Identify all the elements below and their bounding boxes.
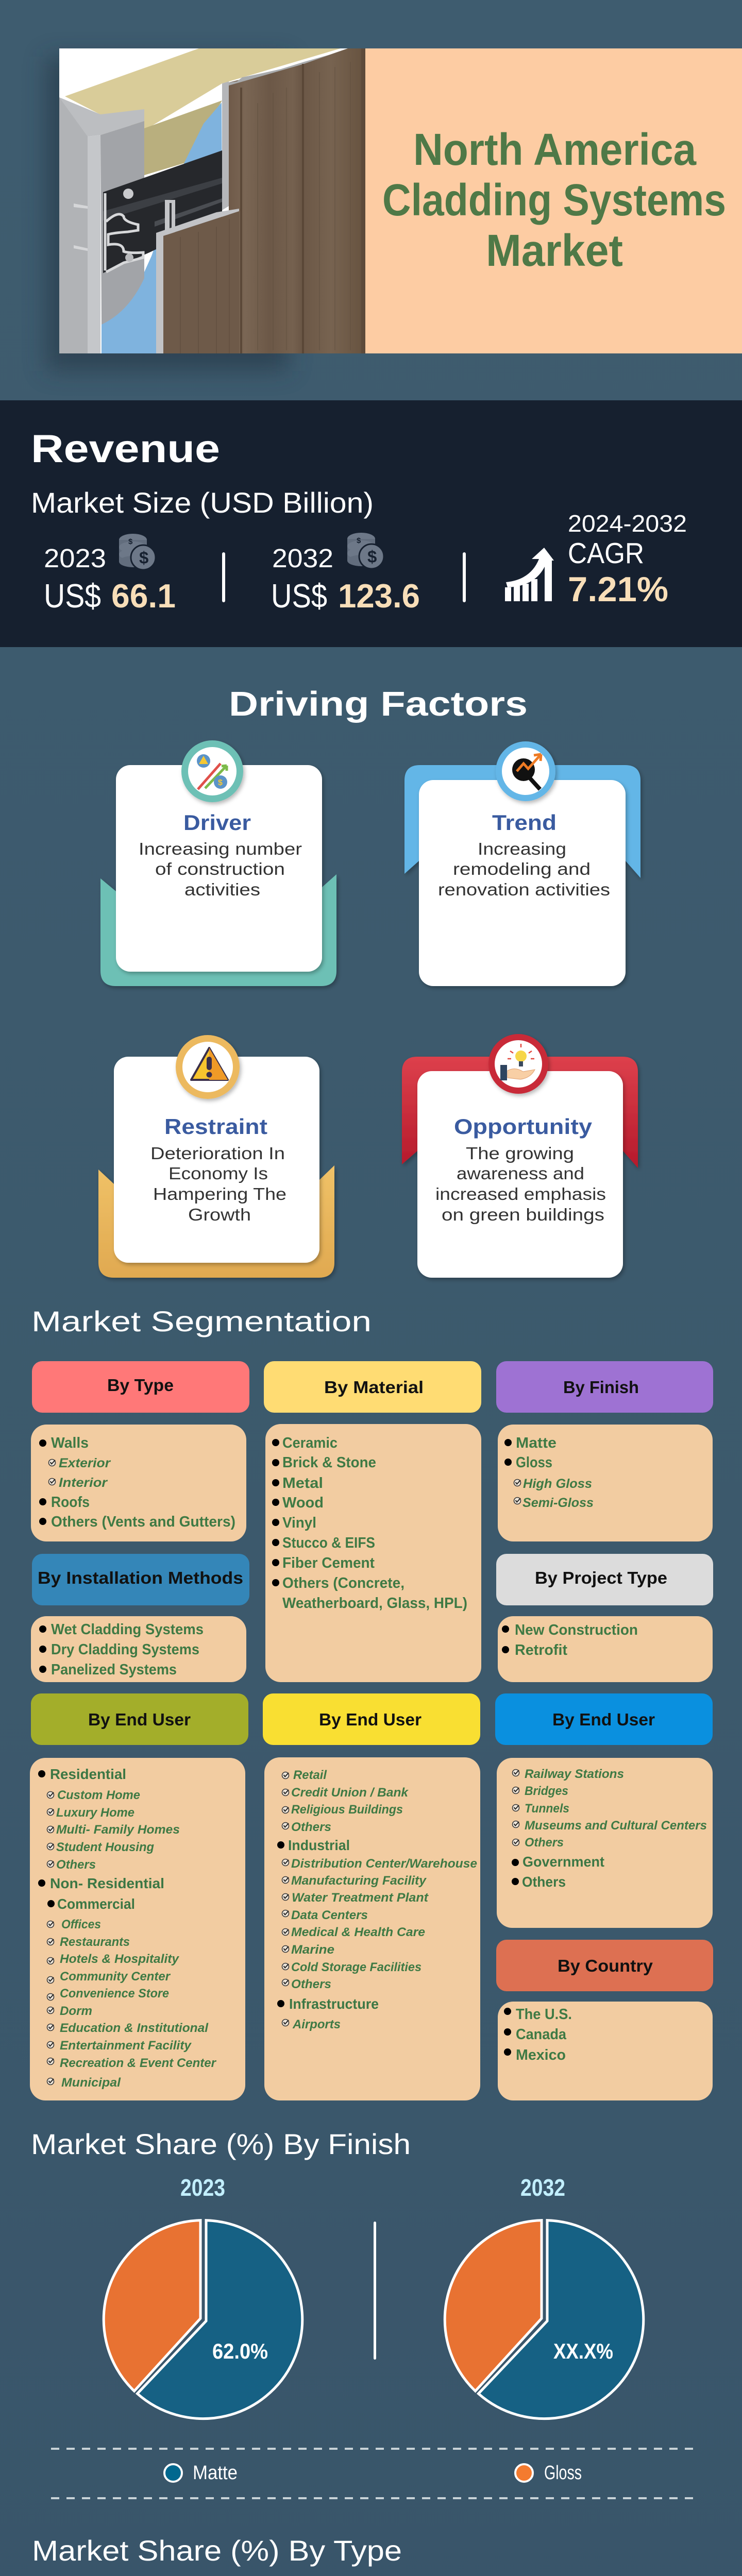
label: Opportunity	[454, 1114, 593, 1139]
title: North America	[413, 125, 697, 175]
panel: residential and non-residential list: Community Center	[60, 1970, 171, 1984]
panel: material list: Brick & Stone	[282, 1454, 376, 1471]
description	[438, 839, 610, 899]
panel: finish list: Gloss	[516, 1454, 552, 1471]
header: by material: By Material	[324, 1378, 424, 1397]
panel: finish list: Semi-Gloss	[522, 1496, 594, 1510]
panel: project type list: New Construction	[515, 1622, 638, 1638]
icon: coins 2032	[347, 533, 384, 569]
panel: residential and non-residential list: Offices	[61, 1918, 101, 1931]
header: by project type	[496, 1554, 713, 1605]
panel: industrial and infrastructure list: Religious Buildings	[291, 1803, 403, 1817]
heading: market share by type: Market Share (%) By Type	[32, 2534, 402, 2567]
panel: installation list	[31, 1616, 246, 1682]
description: The growing	[466, 1144, 574, 1163]
icon: growth chart	[505, 548, 554, 601]
description: activities	[184, 880, 260, 899]
panel: residential and non-residential list: Recreation & Event Center	[60, 2056, 217, 2070]
panel: residential and non-residential list: Non- Residential	[50, 1875, 164, 1891]
panel: country list: The U.S.	[516, 2006, 572, 2023]
panel: industrial and infrastructure list: Cold Storage Facilities	[291, 1960, 421, 1974]
label: Trend	[492, 810, 556, 835]
panel: material list: Stucco & EIFS	[282, 1535, 375, 1551]
panel: type list: Walls	[51, 1435, 89, 1451]
icon: coins 2023	[119, 534, 156, 570]
icon: driver	[181, 740, 243, 802]
description	[435, 1144, 606, 1224]
panel: industrial and infrastructure list: Industrial	[288, 1837, 350, 1853]
header: by end user (green)	[31, 1693, 248, 1745]
card: restraint	[98, 1035, 334, 1278]
header: by country: By Country	[558, 1956, 653, 1975]
subheading: market size: Market Size (USD Billion)	[31, 486, 374, 519]
panel: industrial and infrastructure list: Marine	[291, 1943, 334, 1957]
panel: country list: Canada	[516, 2026, 567, 2043]
panel: type list: Interior	[59, 1476, 108, 1490]
panel: material list: Others (Concrete,	[282, 1575, 404, 1591]
stat: 2032 revenue: 123.6	[338, 577, 420, 615]
description	[150, 1144, 286, 1224]
panel: residential and non-residential list: Others	[56, 1858, 96, 1872]
header: by type: By Type	[107, 1376, 174, 1395]
panel: residential and non-residential list: Student Housing	[56, 1840, 154, 1854]
panel: type list: Roofs	[51, 1494, 90, 1511]
pie chart: finish 2023	[104, 2221, 302, 2419]
panel: project type list: Retrofit	[515, 1642, 567, 1658]
panel: residential and non-residential list: Dorm	[60, 2004, 92, 2018]
panel: material list: Wood	[282, 1495, 324, 1511]
label: 2023 finish: 2023	[180, 2174, 225, 2201]
title	[382, 125, 726, 276]
heading: driving factors: Driving Factors	[229, 685, 528, 723]
description: on green buildings	[442, 1205, 604, 1224]
panel: installation list: Wet Cladding Systems	[51, 1621, 204, 1638]
panel: transport and government list: Others	[522, 1874, 566, 1890]
panel: residential and non-residential list: Municipal	[61, 2076, 121, 2090]
panel: industrial and infrastructure list: Credit Union / Bank	[291, 1786, 409, 1800]
panel: residential and non-residential list: Hotels & Hospitality	[60, 1952, 180, 1966]
description: Increasing	[478, 839, 566, 858]
panel: type list: Exterior	[59, 1456, 111, 1470]
header: by end user (blue)	[495, 1693, 713, 1745]
stat: 2023 revenue: US$	[44, 577, 101, 615]
panel: project type list	[498, 1616, 713, 1682]
divider	[463, 552, 466, 602]
header: by finish: By Finish	[563, 1378, 639, 1397]
card: trend	[404, 741, 640, 986]
description: Hampering The	[153, 1184, 286, 1204]
panel: transport and government list: Bridges	[525, 1784, 568, 1798]
label: Restraint	[164, 1114, 267, 1139]
stat: CAGR: CAGR	[568, 537, 644, 570]
description: remodeling and	[453, 859, 591, 878]
stat: 2023 revenue: 66.1	[111, 577, 176, 615]
heading: market segmentation: Market Segmentation	[31, 1305, 372, 1337]
description: of construction	[155, 859, 285, 878]
panel: residential and non-residential list: Restaurants	[60, 1935, 130, 1949]
panel: transport and government list: Others	[525, 1836, 564, 1850]
panel: transport and government list: Tunnels	[525, 1802, 569, 1816]
stat: 2023 revenue: 2023	[44, 544, 106, 573]
legend: finish	[164, 2462, 582, 2484]
header: by type	[32, 1361, 249, 1413]
description: Deterioration In	[150, 1144, 285, 1163]
panel: industrial and infrastructure list: Data Centers	[291, 1908, 368, 1922]
card: opportunity	[402, 1034, 638, 1278]
header: by installation methods: By Installation Methods	[38, 1568, 243, 1587]
stat: 2023 revenue	[44, 544, 176, 615]
panel: transport and government list	[497, 1758, 713, 1928]
title: Market	[486, 226, 623, 276]
panel: material list: Weatherboard, Glass, HPL)	[282, 1595, 467, 1612]
header: by project type: By Project Type	[535, 1568, 667, 1587]
description: Increasing number	[139, 839, 302, 858]
stat: CAGR	[568, 510, 687, 609]
legend: finish: Gloss	[544, 2462, 582, 2484]
panel: material list: Vinyl	[282, 1515, 316, 1531]
description: awareness and	[457, 1164, 584, 1183]
hero: cladding system illustration	[59, 48, 365, 353]
header: by material	[264, 1361, 481, 1413]
panel: transport and government list: Government	[522, 1854, 604, 1870]
icon: driver: $	[218, 778, 223, 787]
panel: installation list: Panelized Systems	[51, 1662, 177, 1678]
heading: revenue: Revenue	[31, 427, 220, 471]
panel: material list	[265, 1424, 481, 1682]
panel: residential and non-residential list: Residential	[50, 1766, 126, 1782]
description: Economy Is	[168, 1164, 268, 1183]
description	[139, 839, 302, 899]
panel: industrial and infrastructure list: Others	[291, 1977, 331, 1991]
panel: industrial and infrastructure list: Airports	[292, 2018, 341, 2031]
panel: residential and non-residential list: Multi- Family Homes	[56, 1823, 180, 1837]
icon: warning	[176, 1035, 240, 1099]
header: by country	[496, 1940, 713, 1991]
stat: CAGR: 2024-2032	[568, 510, 687, 537]
legend: finish: Matte	[193, 2462, 238, 2484]
panel: residential and non-residential list: Entertainment Facility	[60, 2039, 192, 2053]
panel: industrial and infrastructure list: Others	[291, 1820, 331, 1834]
panel: industrial and infrastructure list: Infrastructure	[289, 1996, 379, 2012]
icon: opportunity	[488, 1034, 548, 1094]
panel: industrial and infrastructure list	[264, 1757, 480, 2100]
header: by end user (blue): By End User	[552, 1710, 655, 1729]
value: XX.X%: XX.X%	[553, 2339, 613, 2363]
hero image shadow	[46, 57, 289, 371]
panel: material list: Fiber Cement	[282, 1555, 375, 1571]
revenue panel	[0, 400, 742, 647]
panel: residential and non-residential list: Custom Home	[57, 1788, 140, 1802]
panel: transport and government list: Museums and Cultural Centers	[525, 1819, 707, 1833]
header: by finish	[496, 1361, 713, 1413]
divider	[222, 552, 225, 602]
panel: type list	[31, 1425, 246, 1541]
value: 62.0%: 62.0%	[212, 2339, 268, 2363]
stat: 2032 revenue: 2032	[272, 544, 333, 573]
header: by end user (yellow)	[263, 1693, 480, 1745]
stat: 2032 revenue	[271, 544, 420, 615]
icon: trend	[496, 741, 555, 801]
panel: industrial and infrastructure list: Water Treatment Plant	[292, 1891, 429, 1905]
panel: material list: Metal	[282, 1475, 323, 1492]
heading: market share by finish: Market Share (%) By Finish	[31, 2128, 411, 2160]
header: by end user (green): By End User	[88, 1710, 191, 1729]
header: by end user (yellow): By End User	[319, 1710, 421, 1729]
label: 2032 finish: 2032	[520, 2174, 565, 2201]
panel: country list	[498, 2002, 713, 2100]
description: renovation activities	[438, 880, 610, 899]
panel: installation list: Dry Cladding Systems	[51, 1641, 199, 1658]
panel: finish list: High Gloss	[523, 1477, 592, 1491]
panel: residential and non-residential list: Luxury Home	[56, 1806, 134, 1820]
panel: transport and government list: Railway Stations	[525, 1767, 624, 1781]
panel: residential and non-residential list: Education & Institutional	[60, 2021, 209, 2035]
panel: industrial and infrastructure list: Distribution Center/Warehouse	[291, 1857, 477, 1871]
panel: residential and non-residential list: Commercial	[57, 1896, 135, 1912]
description: increased emphasis	[435, 1184, 606, 1204]
pie chart: finish 2032	[445, 2221, 644, 2419]
description: Growth	[188, 1205, 251, 1224]
stat: 2032 revenue: US$	[271, 577, 327, 615]
panel: material list: Ceramic	[282, 1435, 338, 1451]
label: Driver	[183, 810, 251, 835]
panel: type list: Others (Vents and Gutters)	[51, 1514, 235, 1530]
panel: finish list	[498, 1425, 713, 1541]
panel: finish list: Matte	[516, 1435, 556, 1451]
panel: industrial and infrastructure list: Medical & Health Care	[291, 1925, 425, 1939]
panel: residential and non-residential list	[30, 1758, 245, 2100]
divider	[374, 2222, 376, 2360]
panel: residential and non-residential list: Convenience Store	[60, 1987, 169, 2001]
panel: industrial and infrastructure list: Retail	[293, 1768, 327, 1782]
hero title panel	[365, 48, 742, 353]
header: by installation methods	[32, 1554, 249, 1605]
panel: country list: Mexico	[516, 2047, 566, 2063]
panel: industrial and infrastructure list: Manufacturing Facility	[291, 1874, 427, 1888]
stat: CAGR: 7.21%	[568, 570, 668, 609]
card: driver	[100, 740, 336, 986]
